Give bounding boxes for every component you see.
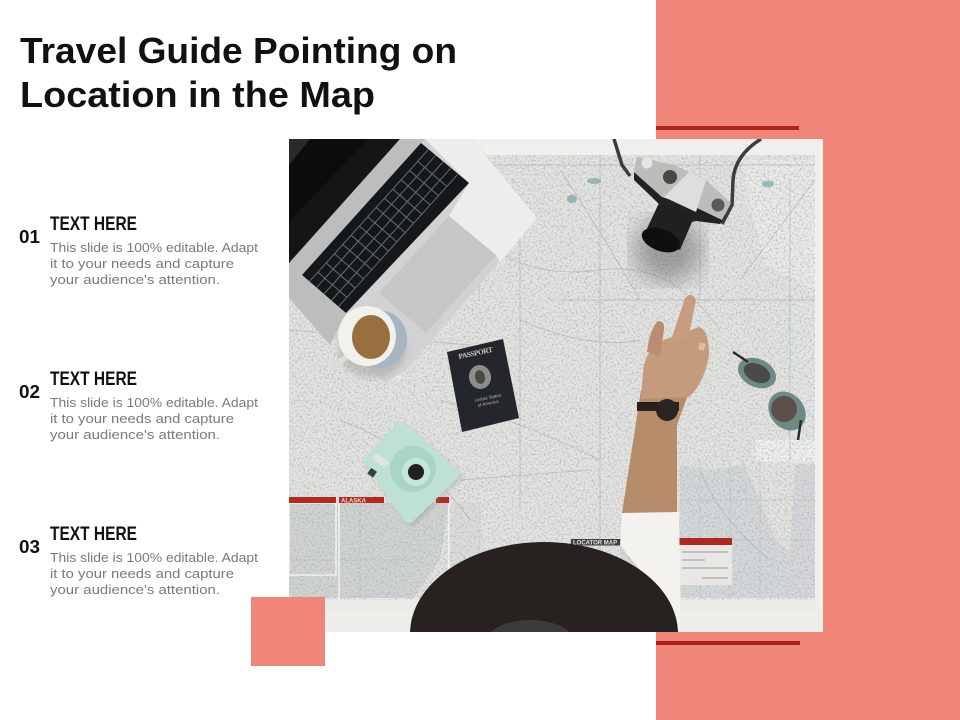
photo: travel map flat lay: [289, 139, 823, 632]
cup shadow: [336, 342, 407, 380]
instant camera lens ring: [390, 446, 436, 492]
sunglasses: [733, 352, 814, 440]
number 03: 03: [19, 537, 40, 557]
description 02: This slide is 100% editable. Adapt: [50, 395, 258, 410]
panel: right coral background: [656, 0, 960, 720]
heading 01: TEXT HERE: [50, 214, 137, 235]
camera body dark: [634, 172, 726, 225]
description 01: [50, 240, 258, 287]
index finger: [672, 295, 696, 337]
table strip below map: [325, 612, 823, 632]
Alaska inset lines: [289, 503, 449, 600]
passport: United States: [474, 392, 502, 403]
instant camera flash: [372, 453, 389, 468]
passport: of America: [477, 399, 499, 408]
number 02: 02: [19, 382, 40, 402]
red map bars: [289, 497, 449, 503]
laptop: [289, 139, 537, 383]
camera shadow: [634, 218, 702, 282]
laptop body: [334, 139, 500, 382]
heading 02: TEXT HERE: [50, 369, 137, 390]
text block 02: [19, 369, 258, 442]
hat: [410, 542, 678, 720]
accent line: top red: [656, 126, 799, 130]
keyboard: [302, 143, 469, 313]
sleeve: [620, 512, 681, 632]
north and east lighter patches: [740, 160, 815, 290]
viewfinder prism: [664, 172, 706, 212]
coffee cup: [334, 306, 407, 378]
laptop screen: [289, 139, 400, 263]
title: Location in the Map: [20, 74, 375, 115]
text block 01: [19, 214, 258, 287]
trackpad: [379, 216, 496, 333]
hat crown: [486, 620, 574, 664]
map legend box: [679, 538, 732, 585]
description 01: This slide is 100% editable. Adapt: [50, 240, 258, 255]
locator map label: LOCATOR MAP: [573, 540, 617, 546]
map sheet: [289, 155, 815, 612]
map roads and folds: [289, 155, 815, 600]
forearm: [622, 390, 689, 513]
cup blue side: [370, 310, 407, 368]
description 02: it to your needs and capture: [50, 411, 234, 426]
camera body silver: [634, 157, 731, 220]
title: [20, 30, 457, 115]
second finger: [647, 321, 664, 356]
laptop left silver: [289, 139, 425, 345]
instant camera body: [370, 428, 453, 517]
map lakes: [587, 178, 601, 184]
gulf and lower water: [620, 465, 815, 600]
cup rim: [338, 306, 396, 366]
passport: PASSPORT: [458, 345, 494, 361]
heading 03: TEXT HERE: [50, 524, 137, 545]
instant camera shadow: [366, 425, 463, 527]
description 02: your audience's attention.: [50, 427, 220, 442]
red map bars: ALASKA: [341, 498, 367, 504]
description 03: [50, 550, 258, 597]
passport emblem: [469, 365, 491, 389]
camera strap: [614, 139, 761, 224]
locator map label: [571, 539, 620, 546]
description 03: it to your needs and capture: [50, 566, 234, 581]
accent line: bottom red: [656, 641, 800, 645]
wristwatch: [637, 399, 679, 421]
palm: [641, 327, 709, 399]
text block 03: [19, 524, 258, 597]
description 03: your audience's attention.: [50, 582, 220, 597]
description 03: This slide is 100% editable. Adapt: [50, 550, 258, 565]
title: Travel Guide Pointing on: [20, 30, 457, 71]
camera lens: [642, 204, 692, 252]
description 01: your audience's attention.: [50, 272, 220, 287]
map speckle texture: [289, 155, 815, 600]
cup handle: [334, 358, 345, 367]
instant camera: [366, 425, 463, 527]
description 01: it to your needs and capture: [50, 256, 234, 271]
description 02: [50, 395, 258, 442]
ring: [698, 342, 706, 351]
coffee: [352, 315, 390, 359]
passport: [447, 339, 519, 432]
number 01: 01: [19, 227, 40, 247]
film camera: [614, 139, 761, 282]
accent square coral: [251, 597, 325, 666]
laptop palm rest right: [425, 139, 537, 262]
map margin strip: [325, 598, 815, 600]
hand and arm: [620, 295, 709, 632]
